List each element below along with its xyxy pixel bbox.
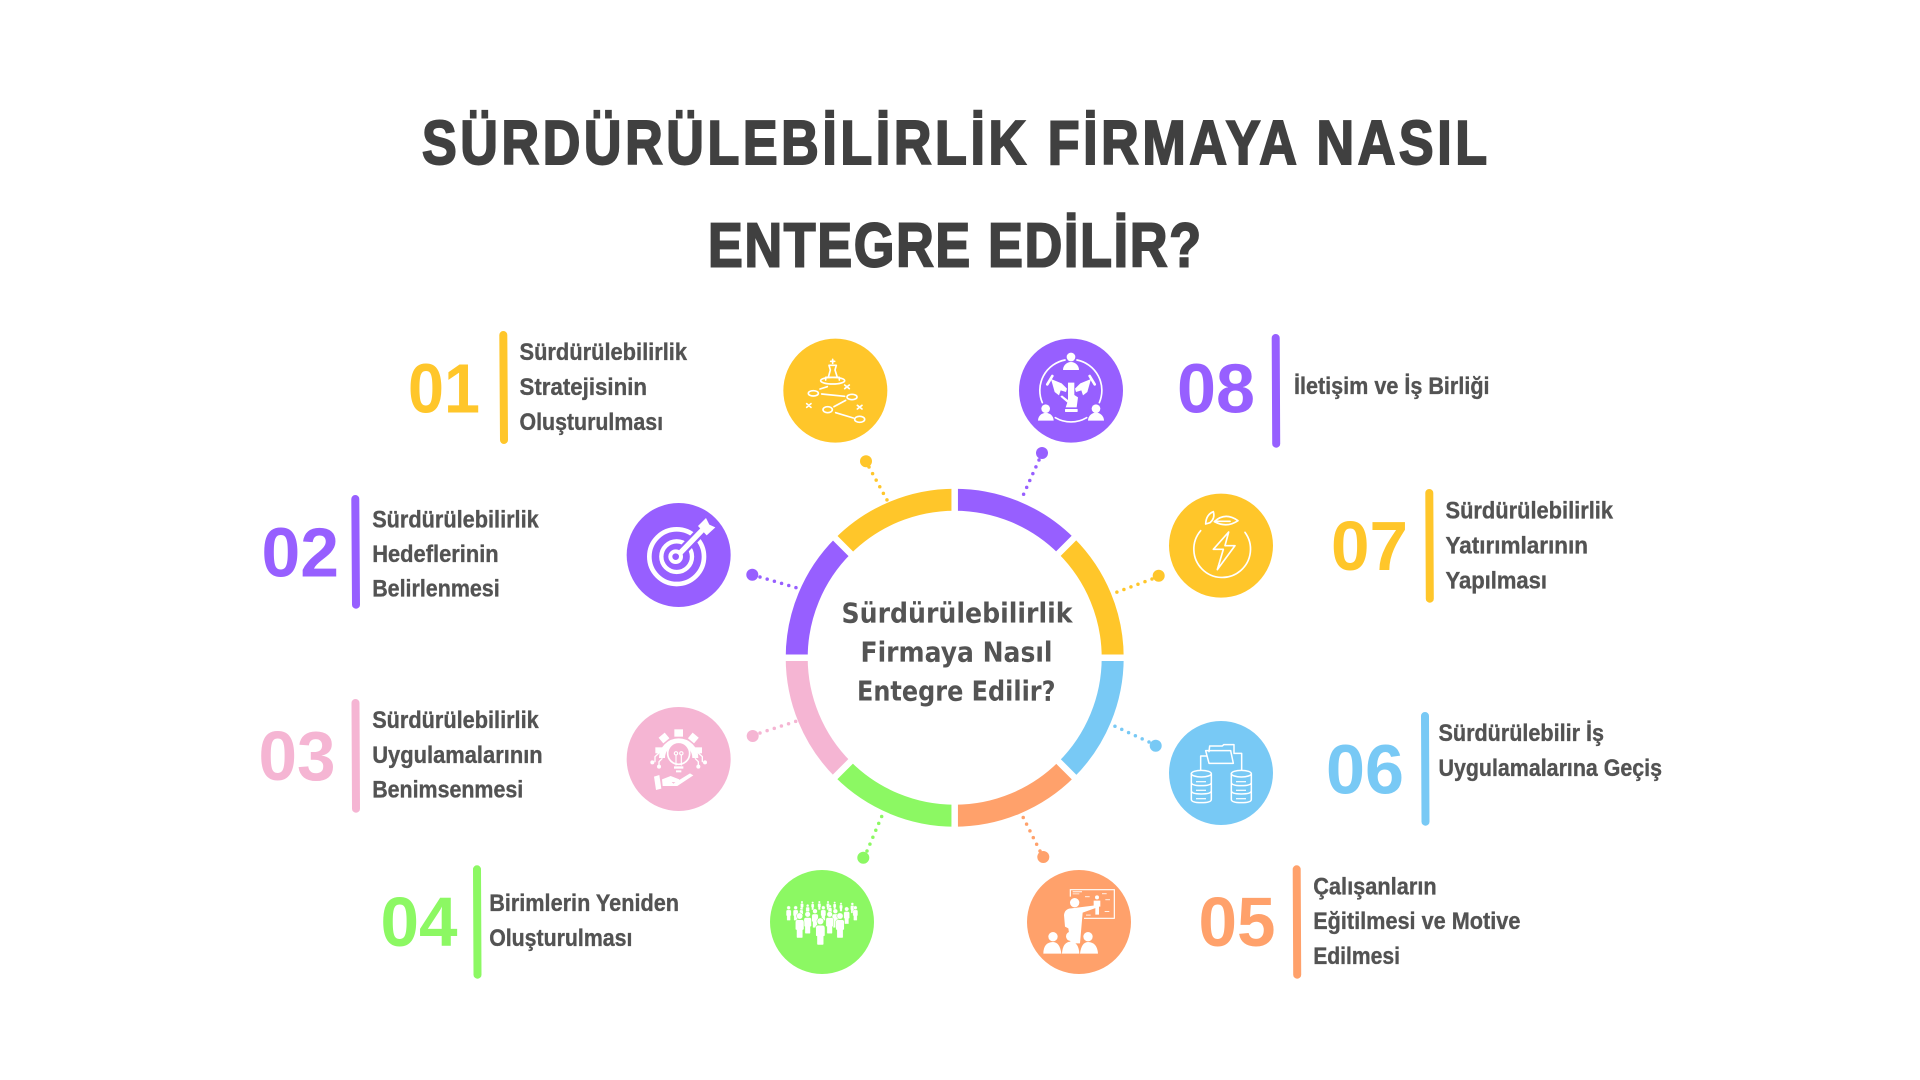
step 07: Yapılması [1446, 567, 1547, 594]
step 02: Hedeflerinin [372, 541, 499, 568]
center text: Firmaya Nasıl [860, 636, 1052, 669]
step 06 [1326, 716, 1662, 822]
title: SÜRDÜRÜLEBİLİRLİK FİRMAYA NASIL [422, 109, 1487, 178]
step 04: Birimlerin Yeniden [489, 890, 679, 917]
connector end dots [746, 447, 1165, 864]
icon: teacher and audience [1027, 870, 1131, 974]
step 07: Yatırımlarının [1446, 532, 1588, 559]
step 02: Belirlenmesi [372, 576, 500, 603]
step 03: Uygulamalarının [372, 742, 543, 769]
step 04 [380, 869, 679, 975]
title [422, 109, 1487, 281]
center text: Sürdürülebilirlik [842, 597, 1074, 630]
dotted connectors [760, 460, 1152, 851]
step 01: 01 [408, 350, 480, 428]
step 06: 06 [1326, 730, 1404, 808]
step 05: 05 [1198, 883, 1276, 961]
step 03: Benimsenmesi [372, 777, 523, 804]
step 06: Sürdürülebilir İş [1438, 720, 1604, 747]
center text [842, 597, 1074, 708]
center text: Entegre Edilir? [857, 675, 1056, 708]
step 01: Oluşturulması [520, 409, 663, 436]
step 02: 02 [262, 514, 339, 592]
step 06: Uygulamalarına Geçiş [1438, 755, 1662, 782]
step 05: Eğitilmesi ve Motive [1313, 908, 1520, 935]
step 05 [1198, 869, 1520, 975]
icon: fruit with energy bolt [1169, 494, 1273, 598]
step 02 [262, 499, 539, 605]
icon: crowd of people [770, 870, 874, 974]
icon: data folder servers [1169, 721, 1273, 825]
step 01 [408, 335, 688, 440]
step 01: Stratejisinin [520, 374, 647, 401]
step 07: Sürdürülebilirlik [1446, 497, 1614, 524]
icon: strategy chess plan [783, 339, 887, 443]
step 08 [1177, 338, 1490, 444]
icon: gear bulb in hand [627, 707, 731, 811]
step 03: Sürdürülebilirlik [372, 707, 539, 734]
step 05: Edilmesi [1313, 943, 1400, 970]
step 04: Oluşturulması [489, 925, 632, 952]
step 05: Çalışanların [1313, 873, 1437, 900]
icon: target with arrow [627, 503, 731, 607]
title: ENTEGRE EDİLİR? [708, 211, 1201, 281]
step 04: 04 [380, 883, 458, 961]
step 08: İletişim ve İş Birliği [1294, 373, 1490, 400]
step 03: 03 [258, 717, 336, 795]
step 07 [1331, 493, 1614, 599]
icon: collaboration hands [1019, 339, 1123, 443]
step 02: Sürdürülebilirlik [372, 506, 539, 533]
step 07: 07 [1331, 507, 1408, 585]
step 03 [258, 703, 543, 809]
step 08: 08 [1177, 349, 1255, 427]
step 01: Sürdürülebilirlik [520, 339, 688, 366]
central ring [777, 480, 1132, 835]
